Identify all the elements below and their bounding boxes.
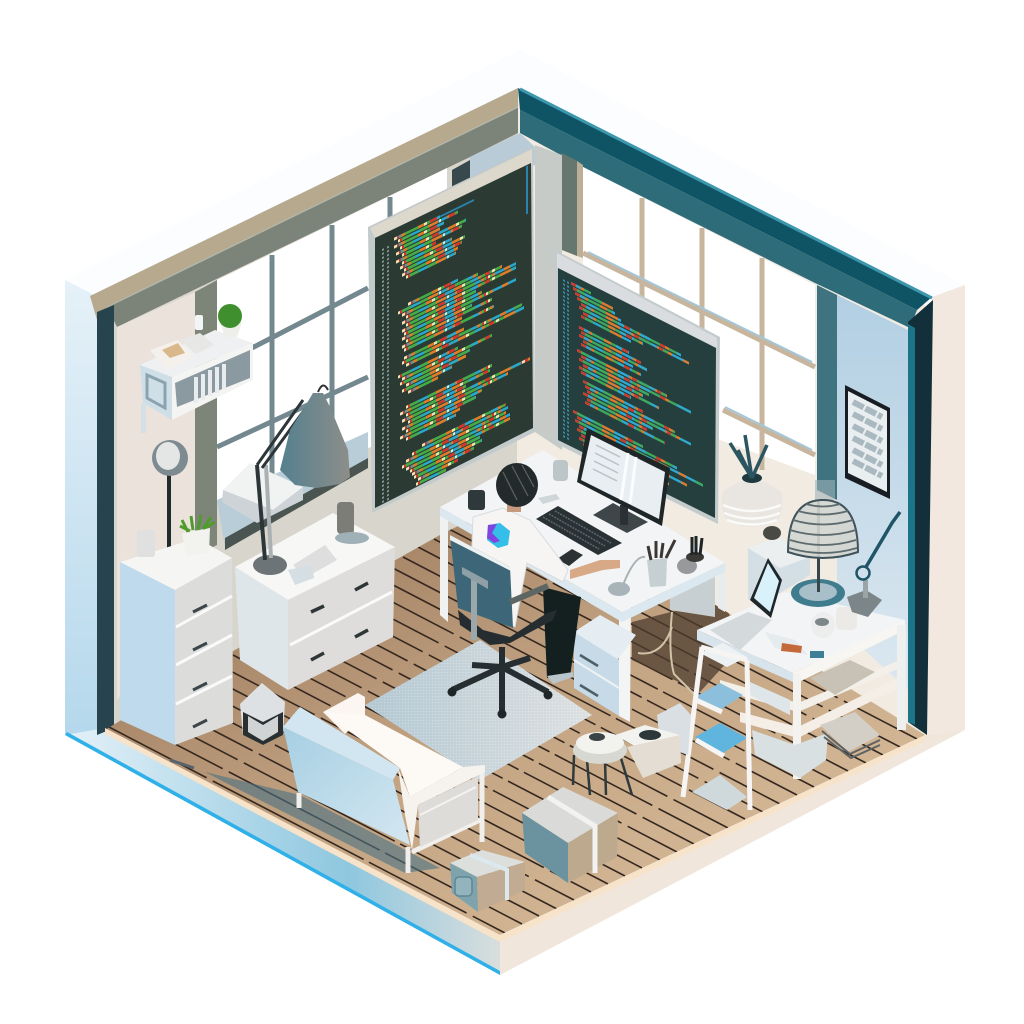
legs xyxy=(543,587,581,678)
mug xyxy=(468,490,485,510)
sofa back xyxy=(283,727,410,845)
waste bin by ladder xyxy=(657,703,691,755)
square ornament on shelf side xyxy=(147,375,165,408)
line number gutter xyxy=(564,280,568,442)
icon on box xyxy=(455,877,472,896)
small note xyxy=(538,494,560,504)
keyboard xyxy=(536,506,622,555)
extra blue row xyxy=(440,166,527,257)
desk legs xyxy=(440,515,725,722)
monitor stand xyxy=(593,503,648,533)
chair base xyxy=(448,647,552,718)
right window xyxy=(583,167,815,475)
right white cabinet behind desk xyxy=(748,526,810,600)
books on shelf xyxy=(150,340,194,370)
papers and book on desk xyxy=(765,632,824,658)
step ladder xyxy=(683,643,750,810)
small plant on shelf xyxy=(218,304,242,337)
cables xyxy=(638,612,694,694)
floor scrap near front left xyxy=(170,760,194,768)
near arm xyxy=(398,765,485,850)
jar xyxy=(137,530,155,557)
code screen: left xyxy=(368,147,535,513)
torso xyxy=(470,508,568,627)
seat xyxy=(323,712,463,797)
far arm xyxy=(323,693,365,734)
desk organizer xyxy=(677,536,704,574)
laptop xyxy=(710,558,782,650)
shelves xyxy=(720,660,900,712)
head and hair xyxy=(496,463,538,512)
bin under shelf xyxy=(752,730,828,778)
rug xyxy=(365,640,592,780)
white sofa xyxy=(283,693,485,873)
desk lamp with large shade xyxy=(253,385,350,575)
work desk xyxy=(440,428,725,722)
left wall top bands xyxy=(90,88,518,330)
floor book stack xyxy=(820,712,880,758)
left drawer cabinet xyxy=(120,515,233,745)
top rail xyxy=(283,707,400,780)
legs xyxy=(793,673,801,779)
drawer unit xyxy=(574,615,636,716)
chair back xyxy=(450,535,513,628)
mouse and charger xyxy=(608,557,645,596)
pen holder xyxy=(647,540,675,587)
shirt logo xyxy=(487,523,510,548)
wall picture xyxy=(845,385,890,499)
small black trash bin xyxy=(240,683,285,745)
right wall top bands xyxy=(518,88,932,328)
small cardboard box xyxy=(450,850,525,912)
left window xyxy=(217,168,447,550)
phone xyxy=(557,549,583,566)
chair seat xyxy=(458,610,557,645)
wire globe lamp xyxy=(788,480,858,607)
large cardboard box xyxy=(522,787,618,883)
armrest xyxy=(510,586,548,602)
back walls xyxy=(90,88,933,735)
line number gutter xyxy=(383,246,388,505)
right shelving desk xyxy=(697,558,906,779)
right desk lamp xyxy=(847,512,900,617)
shadow under work desk xyxy=(632,598,738,692)
books on shelves xyxy=(810,660,875,695)
coloured code rows xyxy=(394,173,530,495)
cups xyxy=(811,607,857,638)
desk top xyxy=(440,450,725,612)
front panel xyxy=(418,776,478,847)
round stool xyxy=(573,732,632,795)
small storage box xyxy=(615,725,681,778)
items on dresser xyxy=(293,545,337,578)
wall lamp on left cabinet xyxy=(152,440,188,571)
planter on stand xyxy=(722,435,782,527)
code screen: right xyxy=(555,250,720,524)
coloured code rows xyxy=(571,283,703,505)
glass jar xyxy=(553,460,568,481)
monitor xyxy=(577,428,670,526)
shadow near front left rim xyxy=(205,772,440,873)
sofa legs and frame xyxy=(299,767,482,873)
outlet box under desk xyxy=(670,575,715,617)
wide white dresser xyxy=(235,502,395,690)
potted plant xyxy=(180,515,215,556)
window sill xyxy=(217,432,368,547)
outer shell of room xyxy=(65,50,965,975)
forearm xyxy=(570,560,620,579)
stack of papers on window sill xyxy=(222,463,303,523)
developer on office chair xyxy=(448,463,620,718)
wood floor xyxy=(105,490,925,942)
wall shelf xyxy=(140,304,253,433)
illustration: isometric developer room xyxy=(65,88,965,975)
